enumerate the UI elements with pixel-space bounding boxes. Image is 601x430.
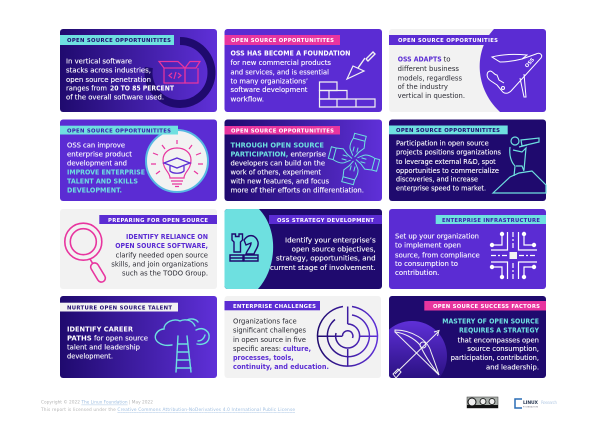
header tag (269, 215, 382, 224)
body text: Set up your organization (395, 232, 479, 240)
body text: PARTICIPATION, (230, 150, 288, 158)
logo: Linux Foundation Research: Research (541, 400, 557, 405)
body text (111, 233, 209, 277)
icon: creative commons badge (467, 397, 498, 408)
header tag (99, 215, 217, 224)
body text: to (444, 56, 450, 64)
body text: with new features, and focus (230, 178, 330, 186)
body text: TALENT AND SKILLS (67, 178, 138, 186)
logo: Linux Foundation Research: FOUNDATION (523, 406, 538, 408)
header tag: PREPARING FOR OPEN SOURCE (108, 218, 208, 224)
header tag: OSS STRATEGY DEVELOPMENT (277, 218, 374, 224)
body text (67, 142, 145, 195)
icon: circuit (490, 232, 537, 279)
body text: culture, (283, 345, 311, 353)
panel background (224, 29, 382, 112)
header tag: ENTERPRISE INFRASTRUCTURE (442, 218, 540, 224)
header tag (60, 35, 174, 45)
body text: to leverage external R&D, spot (396, 158, 496, 166)
body text: more of their efforts on differentiation. (230, 187, 364, 195)
panel background (389, 296, 546, 378)
body text: open source penetration (66, 76, 151, 84)
panel: OSS adapts (389, 29, 546, 112)
body text: contribution. (395, 269, 439, 277)
panel background (389, 209, 546, 289)
header tag (224, 126, 340, 134)
body text: that encompasses open (458, 336, 539, 344)
body text: ranges from (66, 84, 107, 92)
body text: enterprise product (67, 151, 132, 159)
body text: of the overall software used. (66, 94, 164, 102)
icon: code box (159, 62, 200, 83)
body text: in open source in five (233, 336, 306, 344)
panel background (224, 120, 382, 201)
header tag: OPEN SOURCE OPPORTUNITITES (67, 128, 171, 134)
footer text (40, 399, 295, 413)
header tag: OPEN SOURCE OPPORTUNITITES (231, 38, 334, 44)
body text: Identify your enterprise’s (285, 237, 376, 245)
body text: to consumption to (395, 260, 458, 268)
icon: pocket knife (487, 53, 542, 97)
panel background (389, 120, 546, 201)
header tag: OPEN SOURCE OPPORTUNITIES (398, 38, 498, 44)
icon: cloud and ladder (155, 319, 209, 372)
body text: OPEN SOURCE SOFTWARE, (115, 242, 208, 250)
body text: current stage of involvement. (270, 264, 376, 272)
logo: Linux Foundation Research (515, 399, 557, 408)
header tag (60, 126, 178, 134)
body text: IDENTIFY CAREER (67, 325, 134, 333)
panel: enterprise infrastructure (389, 209, 546, 289)
body text: vertical in question. (398, 92, 465, 100)
body text: strategy, opportunities, and (276, 255, 376, 263)
body text: talent and leadership (67, 344, 140, 352)
body text: PATHS (67, 335, 92, 343)
body text: 20 TO 85 PERCENT (110, 84, 174, 92)
icon: joined hands (328, 133, 380, 185)
ring chart (149, 41, 212, 104)
body text: enterprise speed to market. (396, 185, 486, 193)
body text: participation, contribution, (451, 354, 539, 362)
body text: clarify needed open source (116, 251, 208, 259)
body text: workflow. (230, 95, 264, 103)
panel: nurture talent (60, 296, 217, 378)
panel background (60, 296, 217, 378)
purple circle shape (480, 29, 546, 112)
panel: talent and skills (60, 120, 217, 201)
body text: IDENTIFY RELIANCE ON (126, 233, 208, 241)
body text (398, 56, 465, 100)
panel: participation (224, 120, 382, 201)
header tag (224, 35, 340, 45)
header tag (60, 303, 178, 312)
icon: bow and arrow (393, 330, 439, 378)
body text: and leadership. (486, 363, 539, 371)
body text: discoveries, and increase (396, 175, 478, 183)
icon: bricks and trowel (320, 52, 375, 107)
body text: OSS HAS BECOME A FOUNDATION (230, 50, 350, 58)
body text: OSS can improve (67, 142, 125, 150)
icon: chess pieces (230, 234, 258, 261)
purple circle (389, 321, 447, 378)
body text: Organizations face (233, 318, 297, 326)
body text: different business (398, 65, 460, 73)
header tag (224, 301, 320, 310)
body text (396, 140, 502, 193)
body text: software development (230, 86, 308, 94)
header tag: OPEN SOURCE OPPORTUNITITES (231, 128, 334, 134)
body text: OSS ADAPTS (398, 56, 442, 64)
body text: MASTERY OF OPEN SOURCE (442, 318, 539, 326)
body text: In vertical software (66, 58, 132, 66)
body text (66, 58, 174, 102)
panel background (224, 209, 382, 289)
panel background (60, 29, 217, 112)
body text: for open source (94, 335, 148, 343)
body text: for new commercial products (230, 59, 332, 67)
header tag (436, 215, 546, 224)
body text: processes, tools, (233, 354, 294, 362)
body text (230, 50, 350, 103)
body text: and services, and is essential (230, 68, 329, 76)
panel: positions organizations (389, 120, 546, 201)
header tag: OPEN SOURCE SUCCESS FACTORS (433, 304, 540, 310)
panel background (60, 120, 217, 201)
footer text: This report is licensed under the Creative Commons Attribution-NoDerivatives 4.0 International Public License (40, 407, 295, 413)
body text: development and (67, 160, 127, 168)
body text: specific areas: (233, 345, 281, 353)
body text (230, 141, 364, 195)
panel: success factors (389, 296, 546, 378)
body text: stacks across industries, (66, 66, 151, 74)
icon: light bulb with graduation cap (146, 130, 208, 192)
body text: of the industry (398, 83, 448, 91)
body text: Participation in open source (396, 140, 489, 148)
body text: DEVELOPMENT. (67, 187, 122, 195)
body text: source consumption, (467, 345, 539, 353)
header tag (389, 126, 508, 134)
body text: REQUIRES A STRATEGY (459, 327, 539, 335)
icon: person with telescope on mountain (493, 137, 546, 193)
body text: THROUGH OPEN SOURCE (230, 141, 324, 149)
panel background (224, 296, 381, 378)
body text: enterprise (290, 150, 326, 158)
body text: to many organizations’ (230, 77, 308, 85)
header tag (389, 35, 498, 45)
header tag: OPEN SOURCE OPPORTUNITITES (67, 38, 171, 44)
body text: such as the TODO Group. (122, 269, 208, 277)
body text (442, 318, 539, 371)
body text: to implement open (395, 242, 461, 250)
panel: preparing for open source (60, 209, 217, 289)
body text (233, 318, 329, 371)
body text: open source objectives, (292, 246, 376, 254)
icon: pocket knife: OSS (524, 57, 536, 69)
body text (67, 325, 148, 361)
icon: magnifying glass (65, 223, 107, 284)
body text: IMPROVE ENTERPRISE (67, 169, 145, 177)
teal circle shape (224, 209, 273, 289)
logo: Linux Foundation Research: LINUX (523, 400, 539, 406)
body text: continuity, and education. (233, 363, 329, 371)
panel background (60, 209, 217, 289)
body text: significant challenges (233, 327, 307, 335)
body text (270, 237, 376, 272)
panel: foundation (224, 29, 382, 112)
body text: source, from compliance (395, 251, 480, 259)
body text: models, regardless (398, 75, 463, 83)
header tag (424, 301, 546, 310)
panel: OSS strategy (224, 209, 382, 289)
footer text: Copyright © 2022 The Linux Foundation | May 2022 (41, 399, 153, 406)
body text: development. (67, 353, 113, 361)
panel background (389, 29, 546, 112)
body text: projects positions organizations (396, 149, 502, 157)
body text: opportunities to commercialize (396, 167, 499, 175)
header tag: ENTERPRISE CHALLENGES (233, 304, 316, 310)
body text: developers can build on the (230, 160, 325, 168)
header tag: NURTURE OPEN SOURCE TALENT (67, 305, 172, 311)
panel: software penetration (60, 29, 217, 112)
body text: work of others, experiment (230, 169, 321, 177)
body text (395, 232, 480, 277)
icon: circular maze (318, 306, 378, 366)
header tag: OPEN SOURCE OPPORTUNITITES (396, 128, 500, 134)
body text: skills, and join organizations (111, 260, 209, 268)
panel: enterprise challenges (224, 296, 381, 378)
